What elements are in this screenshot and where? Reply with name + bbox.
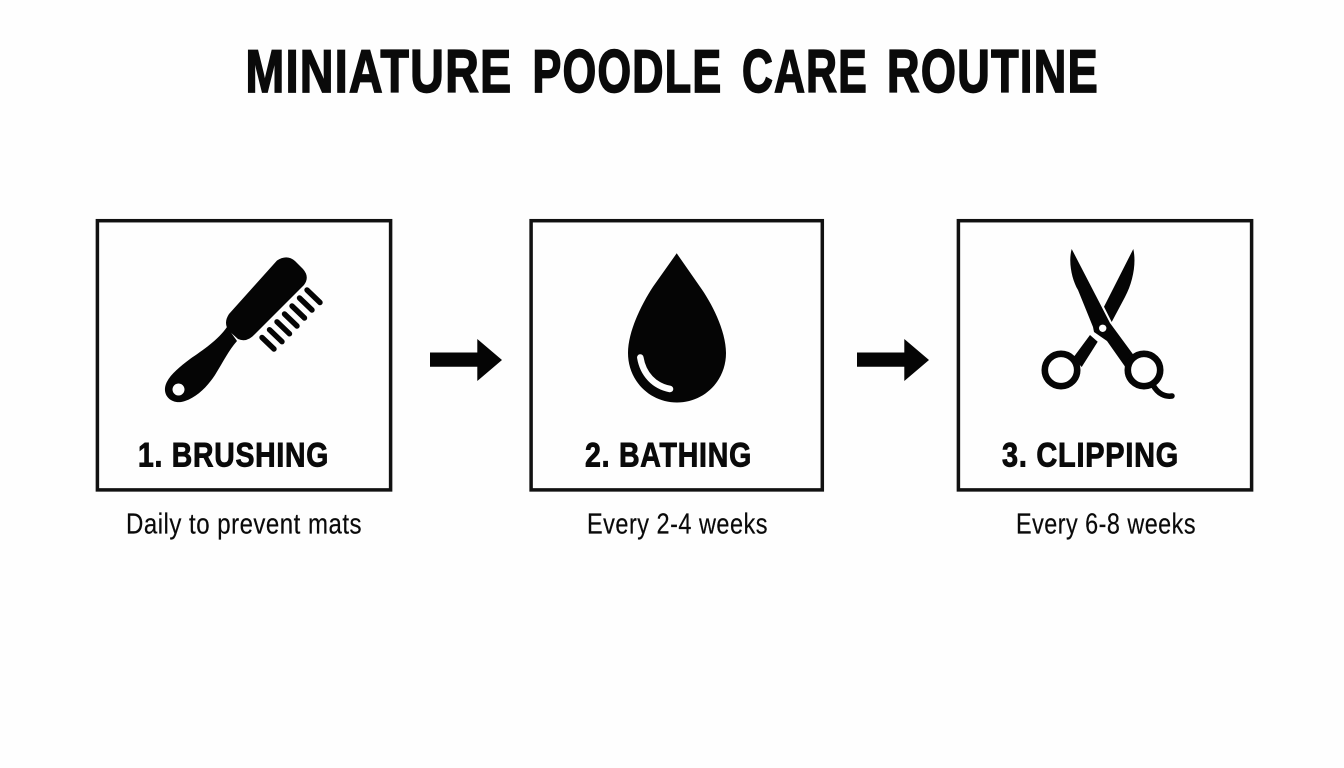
icon: scissors <box>1045 249 1172 396</box>
title: CARE <box>742 37 868 105</box>
icon: brush <box>165 257 320 402</box>
panel: clipping <box>958 221 1252 490</box>
caption: clipping frequency: Every 6-8 weeks <box>1016 508 1196 540</box>
panel frame: clipping <box>958 221 1252 490</box>
label: brushing: 1. BRUSHING <box>138 436 329 474</box>
title: ROUTINE <box>887 37 1099 105</box>
caption: bathing frequency: Every 2-4 weeks <box>587 508 768 540</box>
panel: brushing <box>97 221 391 490</box>
rear blade and left ring <box>1045 249 1134 386</box>
panel: bathing <box>531 221 822 490</box>
label: bathing: 2. BATHING <box>585 436 752 474</box>
caption: brushing frequency: Daily to prevent mats <box>126 508 362 540</box>
arrow: brushing to bathing <box>430 339 502 381</box>
label: clipping: 3. CLIPPING <box>1002 436 1179 474</box>
panel frame: bathing <box>531 221 822 490</box>
panel frame: brushing <box>97 221 391 490</box>
front blade and right ring <box>1070 249 1172 396</box>
title: MINIATURE <box>246 37 512 105</box>
icon: water drop <box>628 253 726 402</box>
arrow: bathing to clipping <box>857 339 929 381</box>
title: POODLE <box>532 37 722 105</box>
